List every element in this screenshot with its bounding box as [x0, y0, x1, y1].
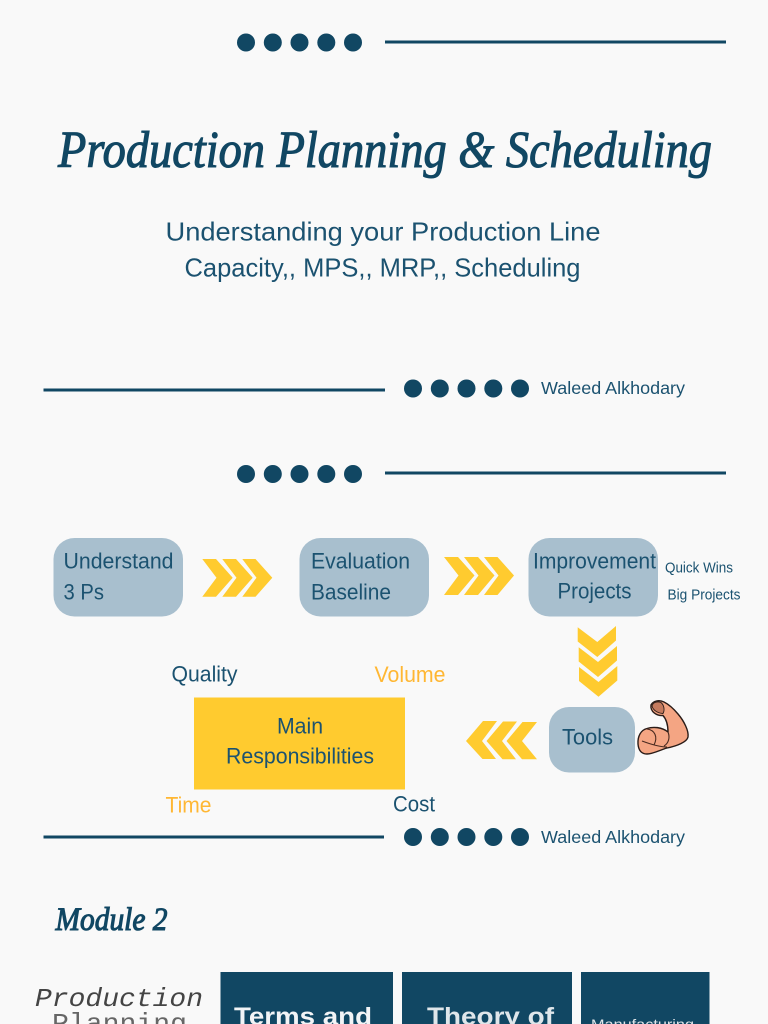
panel: main responsibilities: Main: [277, 714, 323, 738]
box: Evaluation Baseline: Baseline: [311, 580, 391, 604]
author divider 1: Waleed Alkhodary: [541, 378, 685, 398]
box: Understand 3 Ps: Understand: [64, 548, 174, 574]
panel: Terms and: [220, 972, 393, 1024]
box: Evaluation Baseline: [300, 538, 429, 616]
box: Evaluation Baseline: Evaluation: [311, 548, 410, 574]
panel: main responsibilities: [194, 698, 405, 790]
panel: Manufacturing: [581, 972, 710, 1024]
arrow: chevrons right 1: [202, 559, 272, 597]
arrow: chevrons left: [466, 721, 537, 759]
box: Improvement Projects: Projects: [558, 578, 632, 604]
panel: main responsibilities: Responsibilities: [226, 744, 374, 768]
box: Tools: Tools: [562, 724, 613, 750]
box: Understand 3 Ps: 3 Ps: [64, 580, 104, 604]
icon: flexed bicep: [638, 701, 688, 754]
author divider 1: [44, 378, 685, 398]
text: Production Planning: Production: [35, 984, 203, 1014]
box: Understand 3 Ps: [54, 538, 183, 616]
box: Improvement Projects: [528, 538, 658, 616]
author divider 2: [44, 827, 685, 847]
side notes: Big Projects: [668, 588, 740, 604]
heading: Module 2: Module 2: [55, 902, 167, 938]
arrow: chevrons right 2: [444, 557, 514, 595]
arrow: chevrons down: [578, 626, 617, 697]
label: Time: Time: [166, 792, 212, 818]
box: Tools: [549, 707, 635, 772]
label: Volume: Volume: [374, 662, 446, 687]
subtitle: [166, 216, 600, 282]
side notes: [665, 560, 740, 604]
subtitle: Understanding your Production Line: [166, 216, 600, 246]
box: Improvement Projects: Improvement: [533, 548, 656, 574]
text: Production Planning: [35, 984, 203, 1024]
author divider 2: Waleed Alkhodary: [541, 827, 685, 847]
side notes: Quick Wins: [665, 560, 733, 576]
subtitle: Capacity,, MPS,, MRP,, Scheduling: [184, 252, 580, 282]
panel: Theory of: [402, 972, 572, 1024]
top divider with dots: [237, 34, 726, 52]
label: Cost: Cost: [393, 792, 435, 816]
label: Quality: Quality: [172, 662, 238, 686]
section divider with dots: [237, 465, 726, 483]
